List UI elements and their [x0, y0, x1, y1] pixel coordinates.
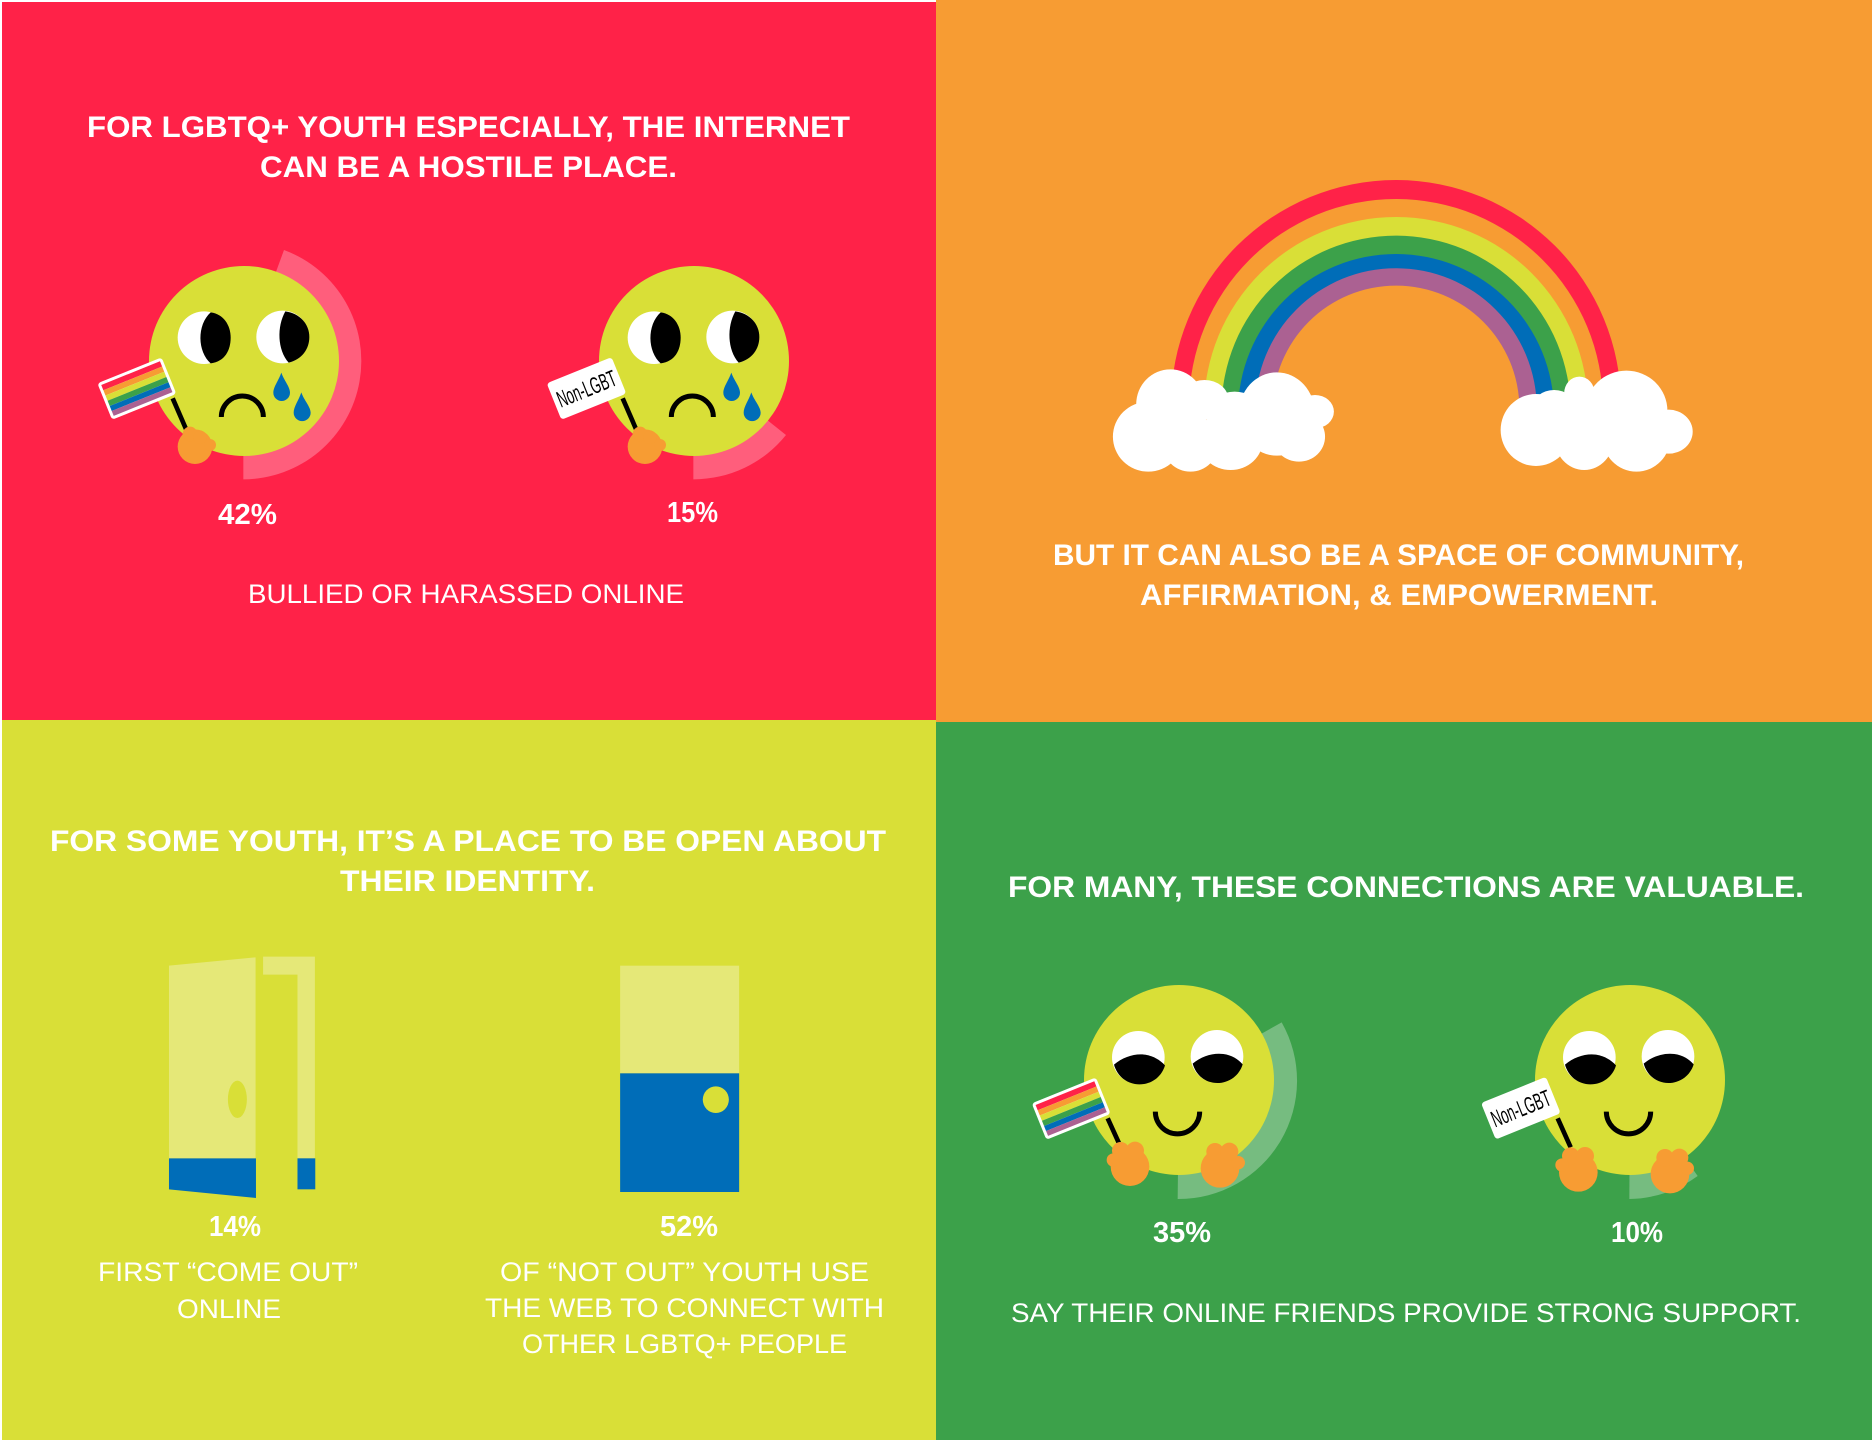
panel: red hostile place — [2, 2, 936, 720]
caption: come out — [98, 1257, 358, 1324]
heading: community: AFFIRMATION, & EMPOWERMENT. — [1140, 579, 1658, 612]
caption: not out — [485, 1257, 884, 1359]
heading: community: BUT IT CAN ALSO BE A SPACE OF COMMUNITY, — [1053, 539, 1744, 572]
panel: green connections — [936, 722, 1872, 1440]
label 35%: 35% — [1153, 1217, 1211, 1249]
label 14%: 14% — [209, 1211, 261, 1243]
sad face LGBTQ with 42 percent arc — [97, 250, 361, 479]
heading: hostile place: FOR LGBTQ+ YOUTH ESPECIALLY, THE INTERNET — [87, 111, 850, 144]
caption: come out: FIRST “COME OUT” — [98, 1257, 358, 1287]
label 52%: 52% — [660, 1211, 718, 1243]
label 15%: 15% — [667, 497, 718, 529]
sad face non-LGBT with 15 percent arc — [547, 266, 789, 479]
caption: not out: OF “NOT OUT” YOUTH USE — [500, 1257, 869, 1287]
happy face LGBTQ with 35 percent arc — [1032, 985, 1297, 1199]
caption: not out: OTHER LGBTQ+ PEOPLE — [522, 1329, 847, 1359]
heading: connections: FOR MANY, THESE CONNECTIONS ARE VALUABLE. — [1008, 871, 1804, 904]
sad face non-LGBT with 15 percent arc: Non-LGBT — [553, 365, 620, 412]
happy face non-LGBT with 10 percent arc: Non-LGBT — [1487, 1085, 1555, 1132]
heading: identity: FOR SOME YOUTH, IT’S A PLACE TO BE OPEN ABOUT — [50, 825, 886, 858]
panel: lime identity — [2, 720, 936, 1440]
panel: orange community — [936, 0, 1872, 722]
heading: hostile place — [87, 111, 850, 184]
label 10%: 10% — [1611, 1217, 1663, 1249]
heading: community — [1053, 539, 1744, 612]
caption: not out: THE WEB TO CONNECT WITH — [485, 1293, 884, 1323]
caption: bullied: BULLIED OR HARASSED ONLINE — [248, 579, 684, 609]
caption: support: SAY THEIR ONLINE FRIENDS PROVIDE STRONG SUPPORT. — [1011, 1298, 1801, 1328]
rainbow with clouds — [1113, 180, 1693, 472]
heading: hostile place: CAN BE A HOSTILE PLACE. — [260, 151, 677, 184]
open door 14 percent — [169, 957, 315, 1198]
heading: identity — [50, 825, 886, 898]
caption: come out: ONLINE — [177, 1294, 281, 1324]
heading: identity: THEIR IDENTITY. — [340, 865, 595, 898]
label 42%: 42% — [218, 499, 277, 531]
happy face non-LGBT with 10 percent arc — [1481, 985, 1725, 1199]
closed door 52 percent — [620, 966, 739, 1192]
